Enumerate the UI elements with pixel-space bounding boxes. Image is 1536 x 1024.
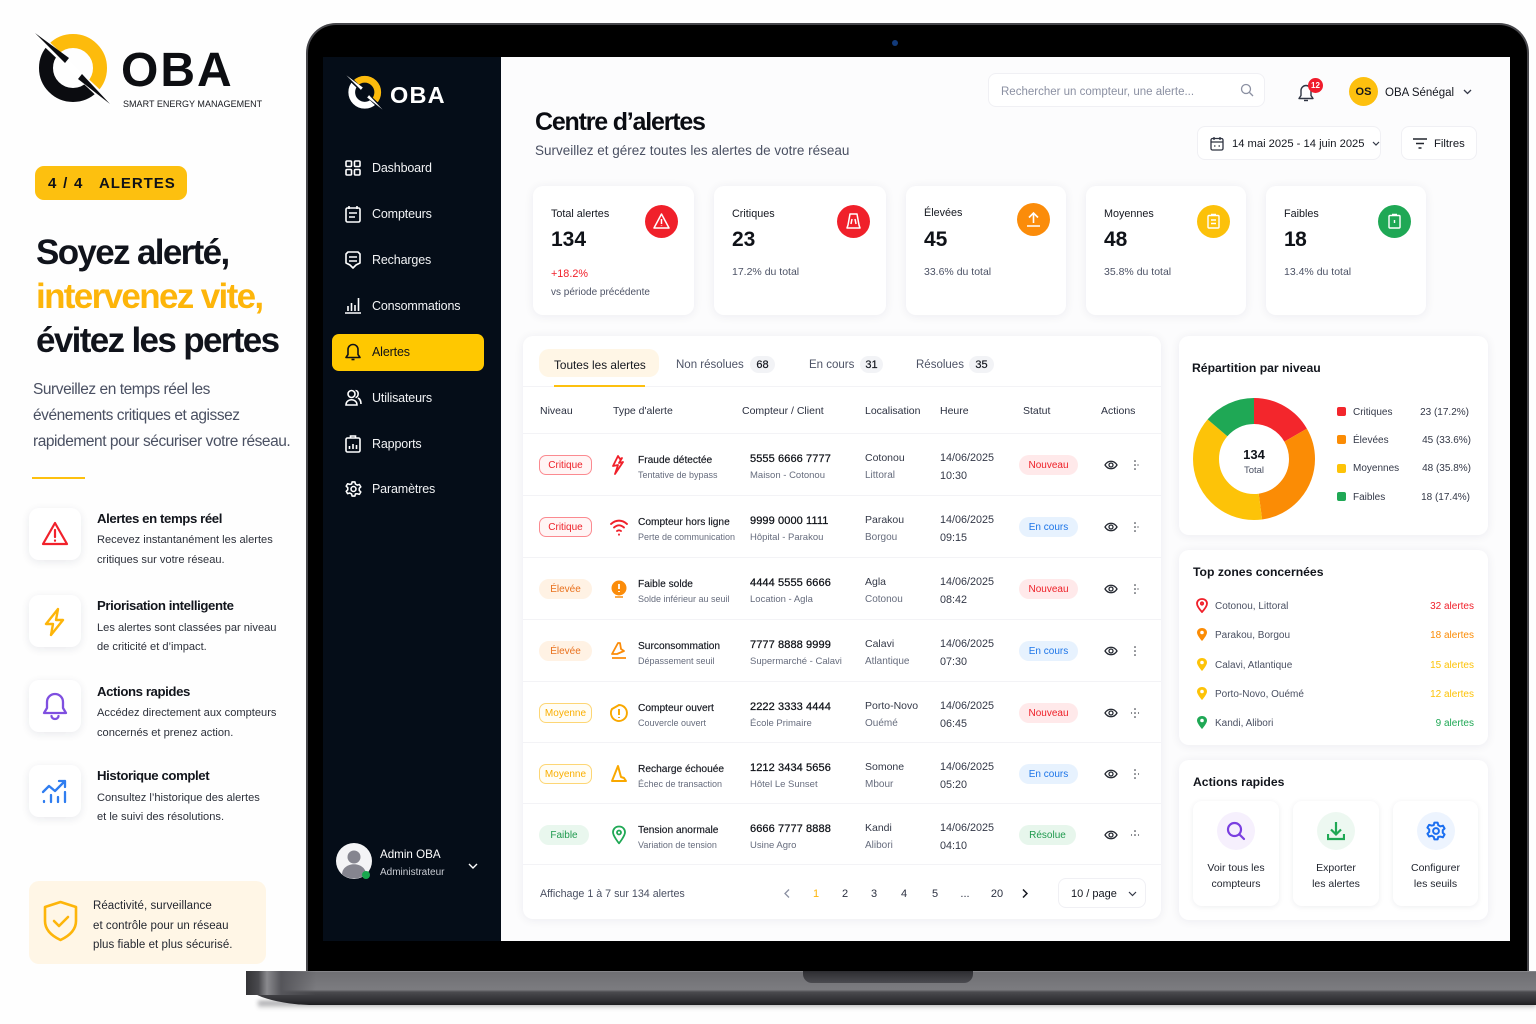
- tab: en cours: En cours: [809, 359, 854, 371]
- filter button: Filtres: [1434, 138, 1465, 150]
- zone: parakou: Parakou, Borgou: [1215, 630, 1290, 641]
- search box: [988, 73, 1265, 107]
- row: compteur ouvert: 2222 3333 4444: [750, 701, 831, 713]
- sidebar: [323, 57, 501, 941]
- pagination: 4: [901, 888, 907, 900]
- zone: kandi: Kandi, Alibori: [1215, 718, 1273, 729]
- icon: bell: [29, 680, 81, 732]
- logo mark: [35, 33, 110, 104]
- icon: dashboard: [345, 160, 361, 176]
- logo wordmark: OBA: [121, 44, 234, 97]
- row: compteur hors ligne: Perte de communication: [638, 532, 735, 542]
- stat card: total: +18.2%: [551, 268, 588, 280]
- row: compteur hors ligne: Compteur hors ligne: [638, 517, 730, 528]
- row: compteur hors ligne: 14/06/2025: [940, 514, 994, 526]
- stat card: faibles: 18: [1284, 228, 1306, 251]
- pagination: 1: [813, 888, 819, 900]
- column: Actions: Actions: [1101, 405, 1135, 417]
- icon: meters: [345, 206, 361, 223]
- icon: location pin: [612, 826, 626, 844]
- row: compteur ouvert: Compteur ouvert: [638, 703, 714, 714]
- feature: historique: et le suivi des résolutions.: [97, 811, 224, 823]
- nav label: Recharges: Recharges: [372, 253, 431, 267]
- zone: calavi: 15 alertes: [1430, 660, 1474, 671]
- row: compteur ouvert: Moyenne: [545, 708, 586, 719]
- feature: actions rapides: Actions rapides: [97, 684, 190, 699]
- tab: active: [539, 349, 659, 377]
- zone: parakou: 18 alertes: [1430, 630, 1474, 641]
- zone: porto-novo: Porto-Novo, Ouémé: [1215, 689, 1304, 700]
- callout: reactivity: Réactivité, surveillance: [93, 900, 212, 912]
- table tabs: 35: [975, 359, 988, 371]
- nav label: Compteurs: Compteurs: [372, 207, 432, 221]
- table header: [523, 387, 1161, 434]
- alerts table panel: [523, 336, 1161, 919]
- intro paragraph: événements critiques et agissez: [33, 407, 240, 424]
- legend label: faibles: Faibles: [1353, 492, 1385, 503]
- zone: cotonou: 32 alertes: [1430, 601, 1474, 612]
- sidebar logo mark: [346, 76, 382, 110]
- nav label: Utilisateurs: Utilisateurs: [372, 391, 432, 405]
- stat card: total: Total alertes: [551, 208, 609, 220]
- sidebar wordmark: OBA: [390, 82, 446, 108]
- row: fraude detectee: Tentative de bypass: [638, 470, 718, 480]
- row: fraude detectee: Nouveau: [1028, 460, 1069, 471]
- action: voir compteurs: compteurs: [1211, 878, 1261, 890]
- row: faible solde: Faible solde: [638, 579, 693, 590]
- stat card: total: [533, 186, 694, 315]
- icon: search: [1217, 812, 1255, 850]
- feature: priorisation: Priorisation intelligente: [97, 598, 234, 613]
- zone: cotonou: [1196, 597, 1474, 613]
- intro paragraph: Surveillez en temps réel les: [33, 381, 210, 398]
- icon: low: [1378, 205, 1411, 238]
- tab: non resolues: Non résolues: [676, 359, 744, 371]
- row: compteur hors ligne: Borgou: [865, 532, 897, 543]
- stat card: moyennes: 35.8% du total: [1104, 266, 1171, 278]
- legend label: elevees: Élevées: [1353, 435, 1389, 446]
- account menu: OBA Sénégal: [1385, 87, 1454, 99]
- stat card: elevees: [906, 186, 1066, 315]
- stat card: critiques: [714, 186, 886, 315]
- legend value: faibles: 18 (17.4%): [1421, 492, 1470, 503]
- pagination: ...: [960, 888, 970, 900]
- legend swatch: moyennes: [1337, 464, 1346, 473]
- search box: Rechercher un compteur, une alerte...: [1001, 86, 1194, 98]
- stat card: faibles: 13.4% du total: [1284, 266, 1351, 278]
- pagination: 3: [871, 888, 877, 900]
- action: exporter: les alertes: [1312, 878, 1360, 890]
- feature: actions rapides: Accédez directement aux compteurs: [97, 707, 276, 719]
- panel heading: actions rapides: Actions rapides: [1193, 775, 1284, 789]
- action: configurer: les seuils: [1414, 878, 1457, 890]
- row: faible solde: Nouveau: [1028, 584, 1069, 595]
- stat card: faibles: Faibles: [1284, 208, 1319, 220]
- feature: alertes en temps reel: Alertes en temps réel: [97, 511, 222, 526]
- icon: gear: [1417, 812, 1455, 850]
- row: surconsommation: Calavi: [865, 638, 894, 650]
- zone: porto-novo: 12 alertes: [1430, 689, 1474, 700]
- panel heading: top zones: Top zones concernées: [1193, 565, 1324, 579]
- callout: reactivity: plus fiable et plus sécurisé.: [93, 939, 233, 951]
- icon: open meter: [610, 704, 628, 722]
- main screen background: [501, 57, 1510, 941]
- row: compteur hors ligne: 9999 0000 1111: [750, 515, 828, 527]
- nav label: Paramètres: Paramètres: [372, 482, 435, 496]
- row: surconsommation: 14/06/2025: [940, 638, 994, 650]
- sidebar logo: [346, 76, 446, 110]
- row: compteur ouvert: École Primaire: [750, 718, 812, 729]
- icon: total alert: [645, 205, 678, 238]
- row: tension anormale: Faible: [550, 830, 578, 841]
- row: faible solde: 4444 5555 6666: [750, 577, 831, 589]
- row: surconsommation: [523, 620, 1161, 682]
- nav label: Dashboard: Dashboard: [372, 161, 432, 175]
- feature: alertes en temps reel: [28, 511, 273, 566]
- avatar initials: OS: [1356, 86, 1371, 98]
- icon: recharges: [345, 251, 361, 269]
- filter button: [1401, 126, 1477, 160]
- headline: évitez les pertes: [36, 321, 278, 360]
- intro paragraph: rapidement pour sécuriser votre réseau.: [33, 433, 290, 450]
- base body: [246, 971, 1536, 1005]
- feature: historique: Historique complet: [97, 768, 209, 783]
- table tabs: Toutes les alertes: [554, 358, 646, 372]
- table tabs: 68: [756, 359, 769, 371]
- action: voir compteurs: Voir tous les: [1207, 862, 1265, 874]
- admin profile: Administrateur: [380, 867, 444, 878]
- avatar initials: [1349, 77, 1378, 106]
- row: recharge echouee: 1212 3434 5656: [750, 762, 831, 774]
- feature: priorisation: Les alertes sont classées par niveau: [97, 622, 276, 634]
- panel: top zones: [1179, 550, 1488, 745]
- stat card: critiques: Critiques: [732, 208, 775, 220]
- icon: critical: [837, 205, 870, 238]
- row: recharge echouee: Somone: [865, 761, 904, 773]
- row: recharge echouee: Moyenne: [545, 769, 586, 780]
- row: compteur hors ligne: En cours: [1029, 522, 1068, 533]
- icon: medium: [1197, 205, 1230, 238]
- page size select: 10 / page: [1071, 888, 1117, 900]
- legend value: critiques: 23 (17.2%): [1420, 407, 1469, 418]
- table tabs: 31: [865, 359, 878, 371]
- stat card: elevees: Élevées: [924, 207, 962, 219]
- row: compteur hors ligne: Hôpital - Parakou: [750, 532, 823, 543]
- zone: kandi: [1196, 714, 1474, 730]
- stat card: moyennes: 48: [1104, 228, 1127, 251]
- feature: historique: Consultez l’historique des alertes: [97, 792, 260, 804]
- feature: priorisation: de criticité et d’impact.: [97, 641, 207, 653]
- action: configurer: [1393, 801, 1478, 906]
- icon: low balance: [612, 580, 626, 598]
- row: recharge echouee: Mbour: [865, 779, 893, 790]
- step badge: 4 / 4: [48, 175, 84, 192]
- row: tension anormale: Tension anormale: [638, 825, 718, 836]
- row: surconsommation: Atlantique: [865, 656, 909, 667]
- account menu: [1349, 77, 1472, 106]
- hinge notch: [803, 971, 973, 983]
- legend: [1337, 403, 1473, 505]
- donut total: Total: [1244, 465, 1264, 476]
- admin profile: [336, 843, 478, 879]
- panel heading: repartition: Répartition par niveau: [1192, 361, 1321, 375]
- row: surconsommation: Dépassement seuil: [638, 656, 715, 666]
- laptop frame: [306, 23, 1529, 971]
- stat card: elevees: 33.6% du total: [924, 266, 991, 278]
- pagination: 5: [932, 888, 938, 900]
- legend value: elevees: 45 (33.6%): [1422, 435, 1471, 446]
- headline: Soyez alerté,: [36, 233, 229, 272]
- icon: calendar: [1210, 137, 1224, 151]
- row: compteur ouvert: 14/06/2025: [940, 700, 994, 712]
- callout: reactivity: et contrôle pour un réseau: [93, 920, 229, 932]
- base highlight: [246, 971, 316, 995]
- row: compteur hors ligne: 09:15: [940, 532, 967, 544]
- page size select: [1058, 878, 1146, 908]
- icon: growth chart: [29, 765, 81, 817]
- row: fraude detectee: Critique: [548, 460, 583, 471]
- icon: settings: [345, 481, 362, 497]
- feature: alertes en temps reel: critiques sur votre réseau.: [97, 554, 225, 566]
- icon: fraud bolt: [612, 455, 624, 475]
- column: Heure: Heure: [940, 405, 969, 417]
- row: recharge echouee: [523, 743, 1161, 804]
- action: voir compteurs: [1193, 801, 1279, 906]
- base shadow: [258, 1001, 1536, 1009]
- action: exporter: Exporter: [1316, 862, 1356, 874]
- brand logo: [35, 33, 262, 109]
- icon: warning triangle: [29, 508, 81, 560]
- laptop base: [246, 971, 1536, 1010]
- row: compteur ouvert: 06:45: [940, 718, 967, 730]
- intro paragraph: [33, 381, 290, 450]
- donut chart: [1193, 398, 1315, 520]
- column: Niveau: Niveau: [540, 405, 573, 417]
- date range button: 14 mai 2025 - 14 juin 2025: [1232, 138, 1364, 150]
- row: compteur ouvert: [523, 682, 1161, 743]
- feature: actions rapides: concernés et prenez action.: [97, 727, 233, 739]
- legend label: moyennes: Moyennes: [1353, 463, 1399, 474]
- pagination: 2: [842, 888, 848, 900]
- row: fraude detectee: 5555 6666 7777: [750, 453, 831, 465]
- camera: [892, 40, 898, 46]
- navigation: active item: [332, 334, 484, 371]
- row: faible solde: Cotonou: [865, 594, 903, 605]
- nav label: Alertes: Alertes: [372, 345, 410, 359]
- row: compteur ouvert: Porto-Novo: [865, 700, 918, 712]
- row: fraude detectee: 10:30: [940, 470, 967, 482]
- panel: repartition par niveau: [1179, 336, 1488, 535]
- pagination: 20: [991, 888, 1003, 900]
- callout: reactivity: [29, 881, 266, 964]
- row: tension anormale: Résolue: [1029, 830, 1066, 841]
- step badge: ALERTES: [99, 175, 176, 192]
- row: compteur ouvert: Couvercle ouvert: [638, 718, 706, 728]
- row: recharge echouee: Hôtel Le Sunset: [750, 779, 818, 790]
- headline: [36, 233, 279, 360]
- feature: historique: [28, 768, 260, 823]
- row: faible solde: Élevée: [550, 584, 581, 595]
- row: surconsommation: Élevée: [550, 646, 581, 657]
- row: tension anormale: Kandi: [865, 822, 892, 834]
- stat card: critiques: 17.2% du total: [732, 266, 799, 278]
- zone: calavi: Calavi, Atlantique: [1215, 660, 1292, 671]
- legend label: critiques: Critiques: [1353, 407, 1392, 418]
- legend swatch: elevees: [1337, 435, 1346, 444]
- headline: intervenez vite,: [36, 277, 262, 316]
- stat card: moyennes: Moyennes: [1104, 208, 1154, 220]
- icon: high: [1017, 203, 1050, 236]
- row: fraude detectee: Maison - Cotonou: [750, 470, 825, 481]
- row: fraude detectee: Fraude détectée: [638, 455, 712, 466]
- row: tension anormale: Variation de tension: [638, 840, 717, 850]
- row: tension anormale: 14/06/2025: [940, 822, 994, 834]
- row: fraude detectee: [523, 434, 1161, 496]
- page subtitle: Surveillez et gérez toutes les alertes de votre réseau: [535, 143, 849, 158]
- row: compteur ouvert: Ouémé: [865, 718, 898, 729]
- row: surconsommation: Supermarché - Calavi: [750, 656, 842, 667]
- column: Localisation: Localisation: [865, 405, 920, 417]
- row: faible solde: Solde inférieur au seuil: [638, 594, 730, 604]
- row: faible solde: 08:42: [940, 594, 967, 606]
- zone: porto-novo: [1196, 685, 1474, 701]
- row: faible solde: Location - Agla: [750, 594, 813, 605]
- feature: actions rapides: [28, 684, 276, 739]
- row: surconsommation: En cours: [1029, 646, 1068, 657]
- row: surconsommation: 7777 8888 9999: [750, 639, 831, 651]
- notification bell: [1298, 78, 1323, 102]
- icon: overconsumption: [611, 642, 626, 659]
- row: fraude detectee: 14/06/2025: [940, 452, 994, 464]
- legend value: moyennes: 48 (35.8%): [1422, 463, 1471, 474]
- legend swatch: critiques: [1337, 407, 1346, 416]
- column: Statut: Statut: [1023, 405, 1050, 417]
- stat card: critiques: 23: [732, 228, 755, 251]
- stat card: moyennes: [1086, 186, 1246, 315]
- row: faible solde: [523, 558, 1161, 620]
- table tabs: [523, 336, 1161, 387]
- row: faible solde: 14/06/2025: [940, 576, 994, 588]
- navigation icons: [345, 160, 362, 497]
- next page: [1022, 889, 1028, 898]
- row: compteur ouvert: Nouveau: [1028, 708, 1069, 719]
- icon: shield check: [44, 900, 78, 942]
- row: compteur hors ligne: [523, 496, 1161, 558]
- row: compteur hors ligne: Parakou: [865, 514, 904, 526]
- stat card: faibles: [1266, 186, 1426, 315]
- stat card: elevees: 45: [924, 228, 947, 251]
- tab: resolues: Résolues: [916, 359, 964, 371]
- zone: kandi: 9 alertes: [1436, 718, 1474, 729]
- previous page: [784, 889, 790, 898]
- panel: actions rapides: [1179, 760, 1488, 920]
- pagination: [784, 888, 1028, 900]
- row: tension anormale: Alibori: [865, 840, 893, 851]
- row: recharge echouee: Échec de transaction: [638, 779, 722, 789]
- notification bell: 12: [1311, 81, 1320, 90]
- page title: Centre d’alertes: [535, 108, 705, 136]
- row: fraude detectee: Cotonou: [865, 452, 905, 464]
- column: Type: Type d'alerte: [613, 405, 673, 417]
- icon: failed recharge: [611, 765, 627, 782]
- action: configurer: Configurer: [1411, 862, 1460, 874]
- action: exporter: [1293, 801, 1379, 906]
- row: surconsommation: 07:30: [940, 656, 967, 668]
- row: recharge echouee: 05:20: [940, 779, 967, 791]
- row: tension anormale: 04:10: [940, 840, 967, 852]
- row: faible solde: Agla: [865, 576, 886, 588]
- row: fraude detectee: Littoral: [865, 470, 895, 481]
- row: compteur hors ligne: Critique: [548, 522, 583, 533]
- icon: filter: [1413, 138, 1427, 149]
- icon: bell: [345, 344, 361, 360]
- icon: users: [345, 390, 362, 406]
- icon: reports: [345, 435, 361, 453]
- row: recharge echouee: En cours: [1029, 769, 1068, 780]
- table summary: Affichage 1 à 7 sur 134 alertes: [540, 888, 685, 900]
- step badge: [35, 166, 187, 200]
- chevron: [468, 864, 478, 869]
- stat card: total: 134: [551, 228, 586, 251]
- legend swatch: faibles: [1337, 492, 1346, 501]
- logo tagline: SMART ENERGY MANAGEMENT: [123, 99, 262, 109]
- row: tension anormale: [523, 804, 1161, 865]
- row: tension anormale: 6666 7777 8888: [750, 823, 831, 835]
- icon: consumption: [345, 298, 361, 314]
- zone: calavi: [1196, 656, 1474, 672]
- row: recharge echouee: 14/06/2025: [940, 761, 994, 773]
- nav label: Consommations: Consommations: [372, 299, 460, 313]
- zone: cotonou: Cotonou, Littoral: [1215, 601, 1288, 612]
- nav label: Rapports: Rapports: [372, 437, 422, 451]
- admin profile: Admin OBA: [380, 848, 441, 861]
- icon: lightning: [29, 595, 81, 647]
- zone: parakou: [1196, 626, 1474, 642]
- feature: alertes en temps reel: Recevez instantanément les alertes: [97, 534, 273, 546]
- icon: download: [1317, 812, 1355, 850]
- date range button: [1197, 126, 1381, 160]
- icon: search: [1240, 84, 1254, 96]
- row: recharge echouee: Recharge échouée: [638, 764, 724, 775]
- row: tension anormale: Usine Agro: [750, 840, 796, 851]
- feature: priorisation: [28, 598, 276, 653]
- row: surconsommation: Surconsommation: [638, 641, 720, 652]
- column: Compteur: Compteur / Client: [742, 405, 824, 417]
- stat card: total: vs période précédente: [551, 287, 650, 298]
- avatar: [336, 843, 372, 879]
- donut total: [1224, 446, 1284, 478]
- donut total: 134: [1243, 447, 1265, 462]
- icon: wifi: [610, 520, 628, 536]
